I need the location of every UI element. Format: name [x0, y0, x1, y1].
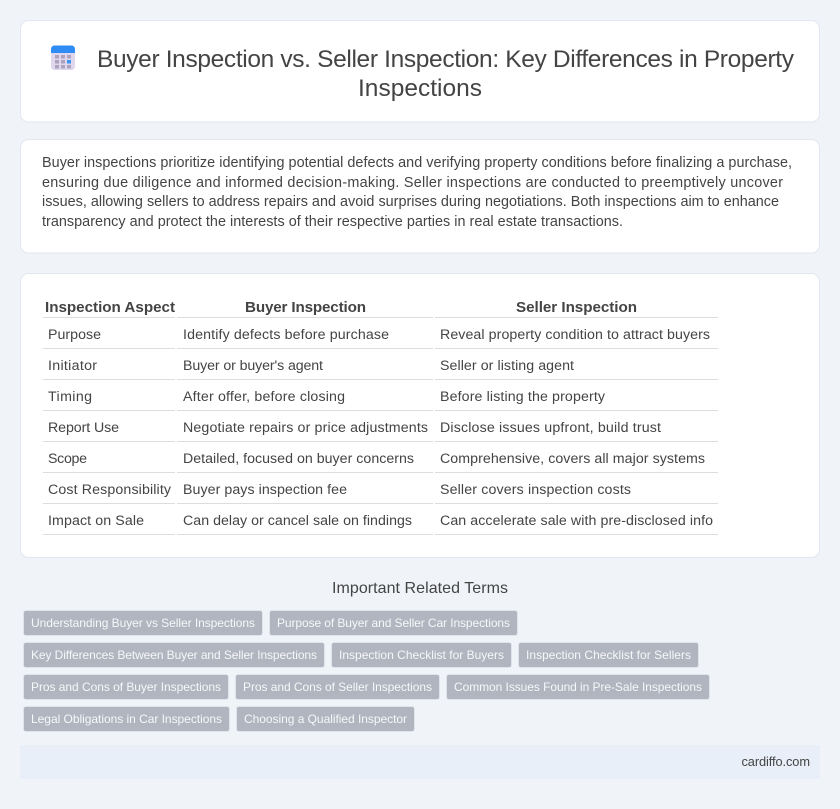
row: report use: Report Use — [48, 420, 119, 436]
tag: Understanding Buyer vs Seller Inspections — [31, 616, 255, 630]
row: purpose — [48, 327, 710, 343]
row: scope: Scope — [48, 451, 87, 467]
tag: Legal Obligations in Car Inspections — [31, 712, 222, 726]
footer: cardiffo.com — [742, 754, 810, 769]
row: initiator: Seller or listing agent — [440, 358, 574, 374]
tag: Choosing a Qualified Inspector — [244, 712, 407, 726]
tag: Pros and Cons of Buyer Inspections — [31, 680, 221, 694]
tag — [24, 642, 324, 668]
panel: introduction text: ensuring due diligence and informed decision-making. Seller inspections are conducted to preemptively uncover — [42, 175, 783, 191]
table rules — [43, 317, 718, 535]
row: report use: Negotiate repairs or price adjustments — [183, 420, 428, 436]
tag — [518, 642, 698, 668]
table header — [45, 299, 637, 316]
tag — [236, 674, 440, 700]
panel: introduction text — [20, 140, 820, 253]
tag — [236, 706, 414, 732]
tag: Pros and Cons of Seller Inspections — [243, 680, 432, 694]
panel: introduction text: transparency and protect the interests of their respective parties in real estate transactions. — [42, 214, 623, 230]
row: timing: Before listing the property — [440, 389, 606, 405]
row: timing: After offer, before closing — [183, 389, 345, 405]
tag: Inspection Checklist for Sellers — [526, 648, 691, 662]
title: Buyer Inspection vs. Seller Inspection: Key Differences in Property — [97, 46, 795, 73]
title: Inspections — [358, 75, 482, 102]
tag — [24, 610, 262, 636]
tag: Common Issues Found in Pre-Sale Inspections — [454, 680, 702, 694]
row: timing: Timing — [48, 389, 92, 405]
row: initiator: Initiator — [48, 358, 97, 374]
row: scope — [48, 451, 705, 467]
row: impact on sale: Impact on Sale — [48, 513, 144, 529]
row: scope: Comprehensive, covers all major systems — [440, 451, 705, 467]
heading: important related terms: Important Related Terms — [332, 580, 508, 597]
tag: Key Differences Between Buyer and Seller Inspections — [31, 648, 317, 662]
table header: Seller Inspection — [516, 299, 637, 316]
panel: comparison table — [20, 274, 820, 558]
row: scope: Detailed, focused on buyer concerns — [183, 451, 414, 467]
row: report use: Disclose issues upfront, build trust — [440, 420, 661, 436]
row: cost responsibility: Buyer pays inspection fee — [183, 482, 347, 498]
table header: Inspection Aspect — [45, 299, 175, 316]
tag: Purpose of Buyer and Seller Car Inspections — [277, 616, 510, 630]
row: cost responsibility — [48, 482, 631, 498]
row: purpose: Purpose — [48, 327, 101, 343]
row: impact on sale: Can delay or cancel sale on findings — [183, 513, 412, 529]
table header: Buyer Inspection — [245, 299, 366, 316]
panel: introduction text: Buyer inspections prioritize identifying potential defects and verifying property conditions before finalizing a purchase, — [42, 155, 792, 171]
row: timing — [48, 389, 606, 405]
row: initiator: Buyer or buyer's agent — [183, 358, 323, 374]
row: initiator — [48, 358, 574, 374]
footer — [20, 745, 820, 779]
row: impact on sale: Can accelerate sale with pre-disclosed info — [440, 513, 713, 529]
tag — [446, 674, 710, 700]
row: purpose: Reveal property condition to attract buyers — [440, 327, 710, 343]
panel: title header — [20, 20, 820, 122]
title — [97, 46, 795, 102]
related terms tags — [24, 610, 710, 732]
icon: calendar — [51, 46, 75, 70]
panel: introduction text: issues, allowing sellers to address repairs and avoid surprises during negotiations. Both inspections aim to enhance — [42, 194, 779, 210]
tag — [24, 674, 228, 700]
row: cost responsibility: Seller covers inspection costs — [440, 482, 631, 498]
row: purpose: Identify defects before purchase — [183, 327, 389, 343]
tag: Inspection Checklist for Buyers — [339, 648, 504, 662]
row: impact on sale — [48, 513, 713, 529]
tag — [24, 706, 230, 732]
tag — [270, 610, 518, 636]
row: cost responsibility: Cost Responsibility — [48, 482, 172, 498]
row: report use — [48, 420, 661, 436]
tag — [332, 642, 512, 668]
